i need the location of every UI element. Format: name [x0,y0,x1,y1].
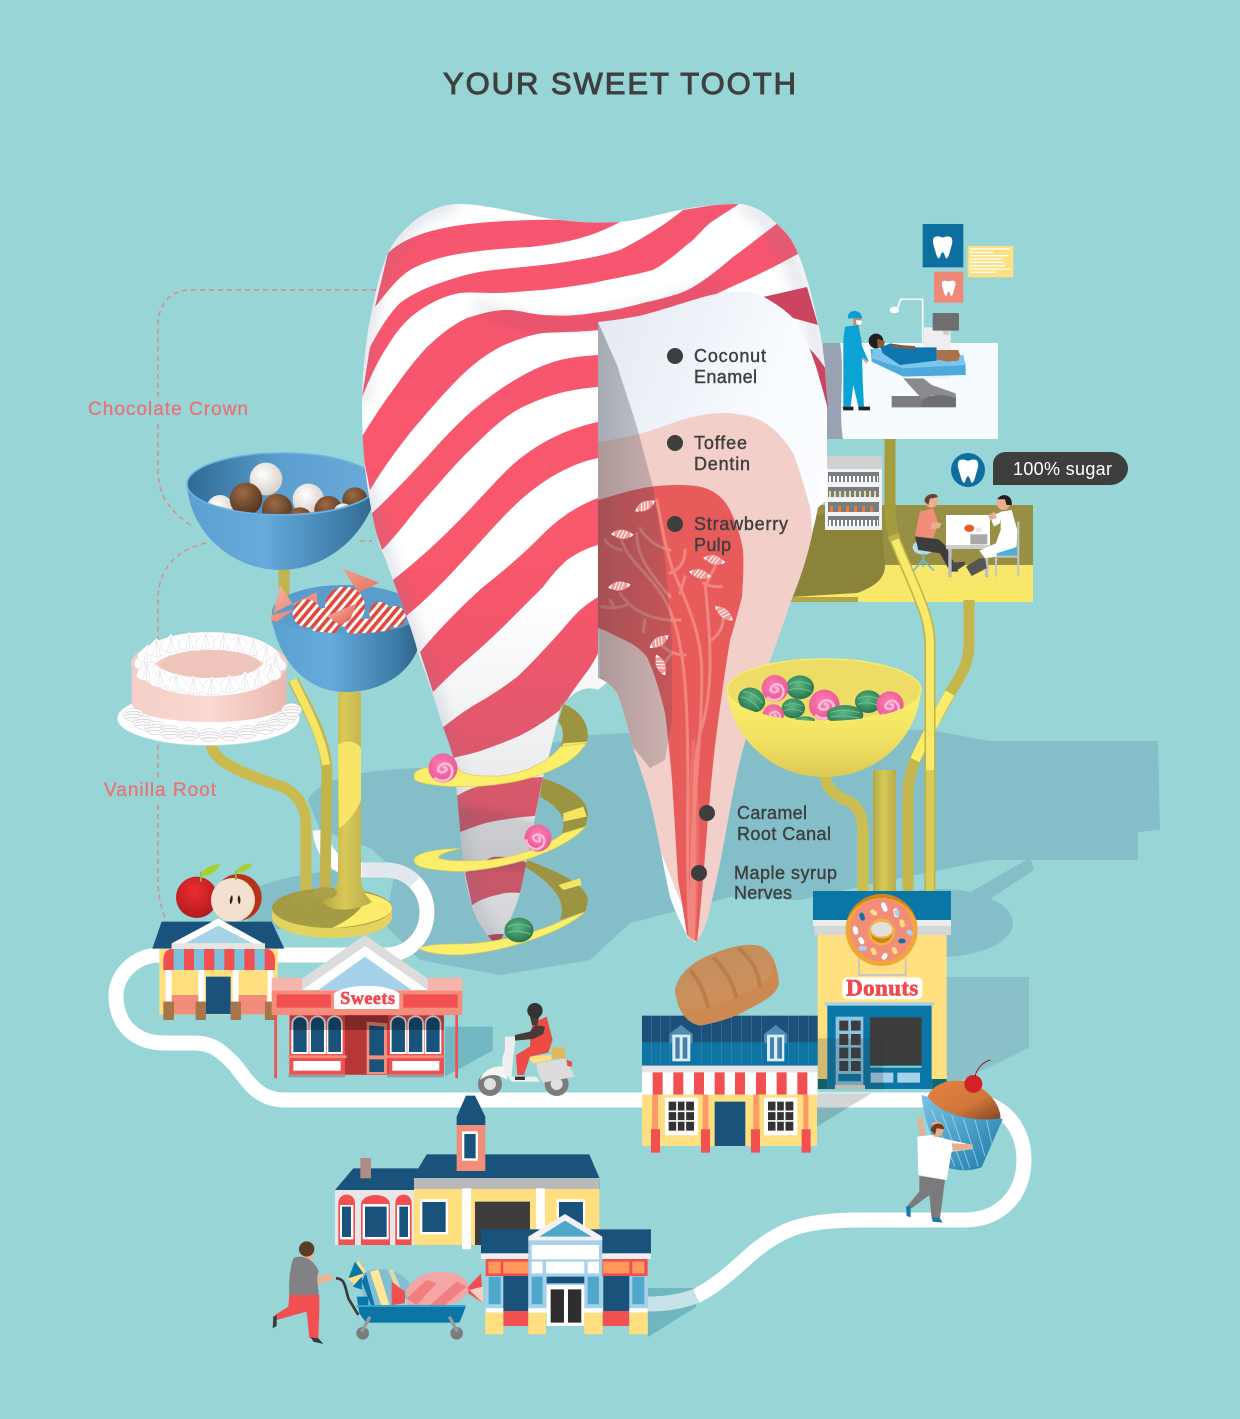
spiral back coils [525,704,588,920]
marker: Caramel Root Canal [699,803,831,844]
strawberry pulp layer [598,485,743,942]
clinic support post [890,439,895,538]
toffee dentin layer [598,413,812,950]
dashed leader: Vanilla Root [158,541,372,920]
marker: Maple syrup Nerves: Maple syrup [734,863,837,883]
dental chair [871,347,966,407]
marker: Strawberry Pulp: Pulp [694,535,731,555]
tooth badge [951,453,985,487]
chocolate balls [208,462,368,514]
stool [913,540,934,571]
marker: Toffee Dentin: Dentin [694,454,750,474]
yellow bowl [727,659,921,777]
medicine shelf [825,456,882,530]
piped trim [123,703,302,742]
donut sign [846,894,918,975]
cake on plate [117,631,302,745]
dashed leader: Chocolate Crown [158,290,376,526]
marker: Toffee Dentin [667,433,750,474]
peppermint candies [271,568,406,640]
marker: Caramel Root Canal: Caramel [737,803,807,823]
front frosting [136,662,281,695]
Sweets shop [272,935,493,1078]
marker: Coconut Enamel [667,346,766,387]
nerve tree [602,500,723,940]
green and pink candies [738,675,904,721]
cupcake [922,1060,1003,1170]
spiral front coils [414,743,585,955]
candy shop front [481,1214,651,1334]
dormers [669,1025,787,1061]
stand base [272,692,392,938]
sugar pill label [993,452,1128,485]
label: Chocolate Crown: Chocolate Crown [88,399,248,420]
crown shadow on cut [598,322,672,768]
marker: Coconut Enamel: Coconut [694,346,766,366]
mini candies [608,497,736,677]
building shadow on donut shop [817,1038,883,1089]
cart [336,1278,466,1340]
tooth cross-section [598,292,823,942]
marker: Strawberry Pulp: Strawberry [694,514,788,534]
giant candies [347,1261,483,1307]
reception scene [913,494,1019,577]
bread loaf [675,945,779,1026]
icon: tooth blue tile [923,224,963,267]
cupcake carrier [906,1060,1003,1223]
desk [946,515,990,577]
floating dentist icons [923,224,1013,303]
donut shop [813,891,951,1127]
donuts sign board: Donuts [846,975,918,1001]
town hall [335,1096,599,1249]
marker: Caramel Root Canal: Root Canal [737,824,831,844]
title: YOUR SWEET TOOTH [443,66,796,101]
delivery road [116,830,1024,1304]
clinic floor with dentist [823,343,998,439]
marker: Toffee Dentin: Toffee [694,433,747,453]
marker: Maple syrup Nerves: Nerves [734,883,792,903]
root canal light core [689,740,699,942]
carrier man [906,1115,973,1223]
dentist nurse [843,311,870,410]
tooth crown with candy stripes [350,200,827,960]
candy balls on spiral [428,754,557,942]
patient [869,334,960,365]
dentist scene [843,299,966,410]
marker: Strawberry Pulp [667,514,788,555]
apples [176,864,262,922]
lamp [890,299,923,344]
marker: Maple syrup Nerves [691,863,837,903]
bowl with chocolate balls [187,453,378,570]
sugar pill label: 100% sugar [1013,459,1112,479]
monitor [924,313,959,378]
doctor [966,495,1019,577]
seated client [915,494,965,572]
patient note [968,246,1013,277]
icon: tooth salmon tile [934,272,963,303]
marker: Coconut Enamel: Enamel [694,367,757,387]
bowl front [272,620,419,692]
stripes right of cut face [763,287,828,410]
pusher man [273,1241,334,1344]
stand stems left [210,565,327,895]
reception floor [790,505,1033,602]
tower [457,1096,485,1171]
scooter rider [478,1003,575,1096]
apple shop [152,864,284,1020]
candy cart and pusher [273,1241,483,1344]
back frosting [134,631,286,672]
coconut enamel layer [598,292,823,942]
sign text: Sweets [340,988,395,1008]
ground shadows [230,727,1160,1337]
label: Vanilla Root: Vanilla Root [104,780,217,801]
yellow bowl stems [825,535,969,892]
bakery shop [642,945,818,1153]
bowl with striped candies [271,568,419,692]
